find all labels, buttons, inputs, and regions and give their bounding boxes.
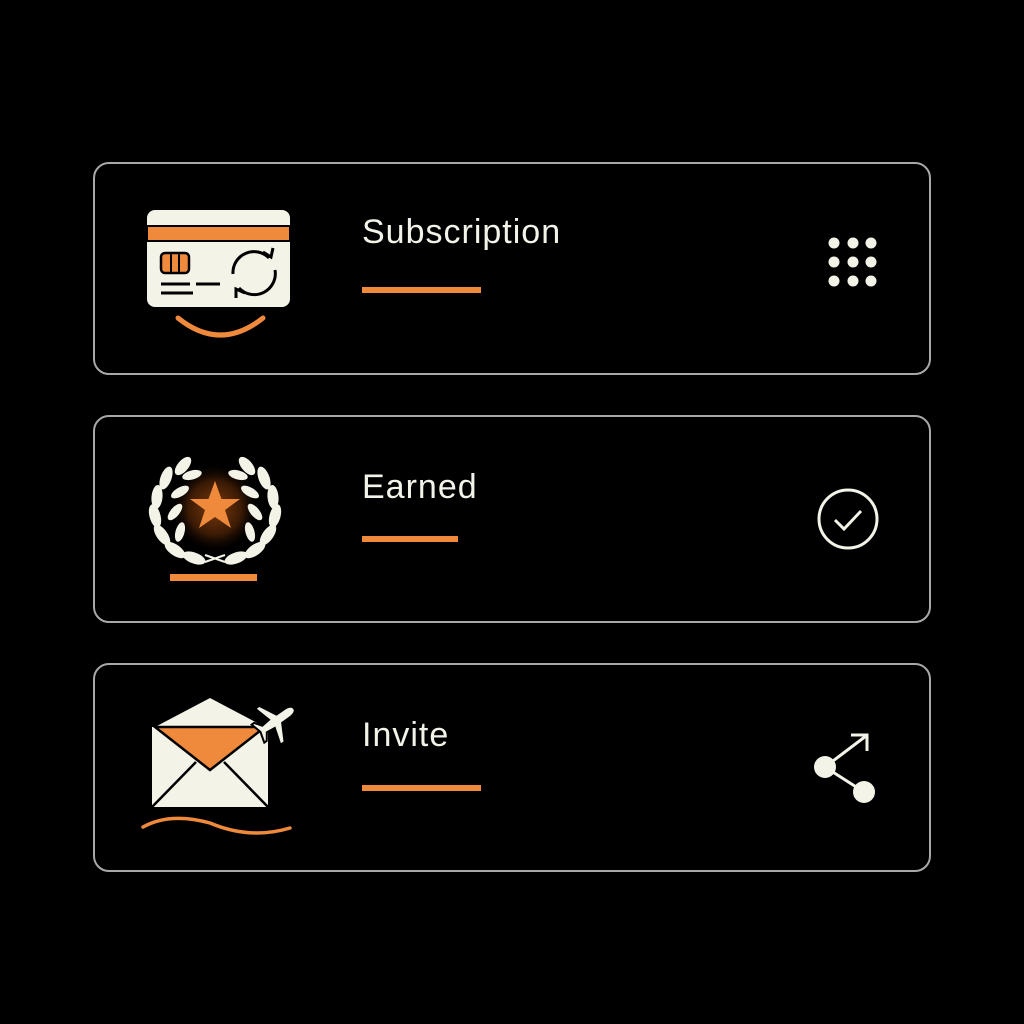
underline: earned (362, 536, 458, 542)
icon: check circle (819, 490, 877, 548)
icon: share arrow (814, 735, 875, 803)
underline: invite (362, 785, 481, 791)
heading: Invite: Invite (362, 716, 449, 754)
panel: subscription (93, 162, 931, 375)
icon: laurel star (147, 454, 283, 581)
heading: Earned: Earned (362, 468, 478, 506)
icon: credit card (147, 210, 290, 335)
heading: Subscription: Subscription (362, 213, 561, 251)
panel: invite (93, 663, 931, 872)
panel: earned (93, 415, 931, 623)
icon: envelope with plane (143, 690, 307, 833)
icon: dot grid (828, 238, 876, 286)
underline: subscription (362, 287, 481, 293)
